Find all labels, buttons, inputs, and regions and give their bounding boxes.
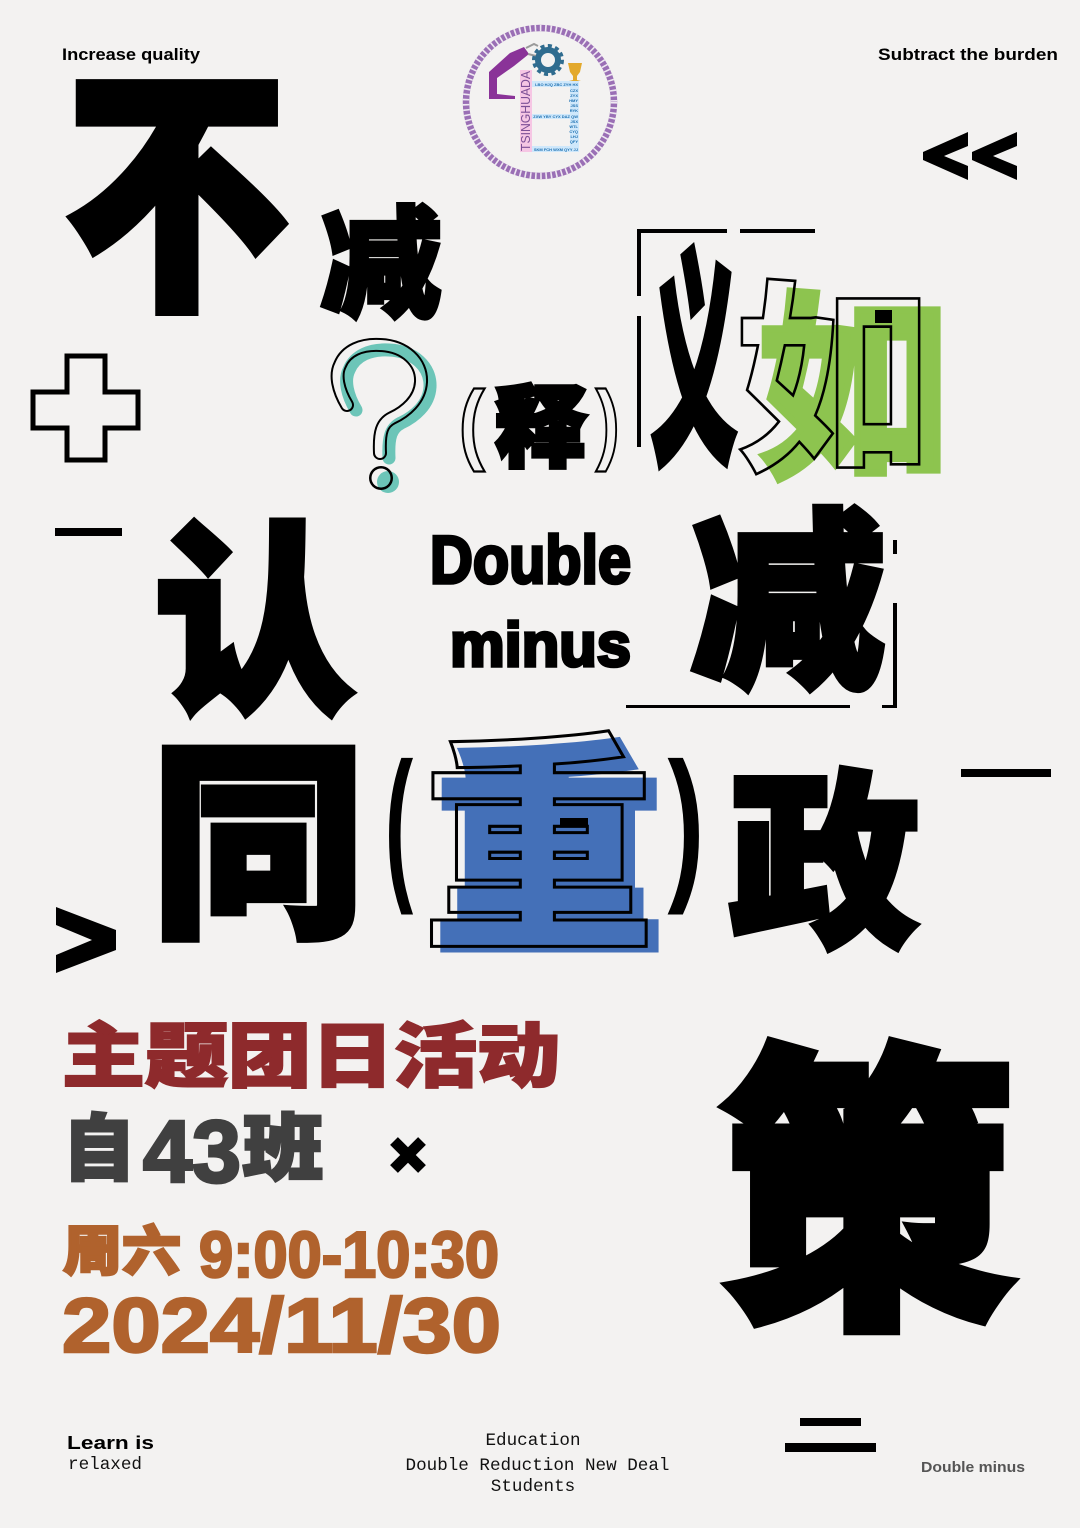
logo letter E of names: CYQ — [569, 129, 578, 134]
glyph 同: 同 — [151, 729, 366, 965]
left bracket: ( — [385, 728, 414, 916]
glyph 策: 策 — [720, 1030, 1015, 1366]
logo letter E of names: ZXW YBY CYX DAZ QW — [533, 114, 578, 119]
icon: outlined plus — [33, 356, 138, 460]
top right caption: Subtract the burden — [878, 45, 1058, 64]
short line right — [961, 769, 1051, 777]
bottom right caption: Double minus — [921, 1459, 1025, 1476]
headline glyph 不: 不 — [66, 54, 287, 342]
icon: double left chevrons — [923, 132, 1017, 180]
bottom left note — [67, 1433, 154, 1475]
logo letter E of names: ZYX — [570, 93, 578, 98]
class name — [63, 1102, 323, 1201]
logo letter E of names: QFY — [570, 139, 578, 144]
english title — [430, 522, 631, 680]
bracketed glyph 释 — [459, 372, 620, 479]
logo robot arm — [489, 44, 538, 99]
decorative double bars — [785, 1418, 876, 1452]
bottom centre note: Double Reduction New Deal — [406, 1456, 669, 1476]
bracketed glyph 释: ( — [459, 372, 485, 472]
event title: 主题团日活动 — [62, 1018, 560, 1096]
event date: 2024/11/30 — [62, 1283, 501, 1369]
icon: question mark — [338, 345, 430, 493]
logo vertical name: TSINGHUADA — [518, 71, 533, 151]
logo letter E of names: LBO HJQ ZBC ZYH HX — [535, 82, 578, 87]
english title: Double — [430, 522, 631, 598]
bottom centre note: Students — [491, 1477, 575, 1497]
frame around 义 — [637, 229, 815, 447]
logo letter E of names: LHJ — [570, 134, 578, 139]
bottom centre note — [406, 1431, 669, 1497]
event time: 9:00-10:30 — [199, 1218, 499, 1291]
outlined glyph 重: 重 — [422, 721, 655, 980]
class name: 班 — [243, 1110, 323, 1190]
event time: 周六 — [63, 1222, 181, 1282]
black glyph 义: 义 — [651, 236, 737, 493]
bracketed glyph 释: ) — [596, 374, 620, 473]
blue glyph 重: 重 — [435, 731, 664, 982]
short line left — [55, 528, 122, 536]
bottom left note: relaxed — [68, 1455, 142, 1475]
logo letter E of names: JSS — [570, 103, 578, 108]
glyph 政: 政 — [729, 760, 919, 972]
bottom left note: Learn is — [67, 1433, 154, 1453]
class name: 自 — [63, 1110, 135, 1190]
logo letter E of names — [532, 81, 579, 152]
logo badge — [466, 28, 614, 176]
right bracket: ) — [668, 729, 704, 916]
bottom centre note: Education — [485, 1431, 581, 1451]
class name: 43 — [143, 1102, 241, 1201]
logo gear — [534, 46, 562, 74]
english title: minus — [450, 611, 631, 680]
frame around 减 — [626, 540, 897, 708]
outlined glyph 如: 如 — [735, 267, 931, 498]
logo letter E of names: CZX — [570, 88, 578, 93]
logo letter E of names: RYK — [570, 108, 578, 113]
top left caption: Increase quality — [62, 45, 201, 64]
logo letter E of names: WTL — [569, 124, 579, 129]
icon: right chevron — [56, 907, 116, 973]
small glyph 减: 减 — [321, 200, 441, 333]
icon: multiply — [394, 1141, 422, 1169]
logo letter E of names: HMY — [569, 98, 578, 103]
event time — [63, 1218, 499, 1291]
logo letter E of names: JSX — [570, 119, 578, 124]
bracketed glyph 释: 释 — [495, 379, 586, 479]
glyph 认: 认 — [154, 509, 354, 739]
logo trophy — [568, 63, 582, 81]
logo letter E of names: SKM FCH WXM QYY JJ — [534, 147, 578, 152]
green glyph 如: 如 — [758, 281, 949, 503]
glyph 减 large: 减 — [691, 497, 885, 712]
